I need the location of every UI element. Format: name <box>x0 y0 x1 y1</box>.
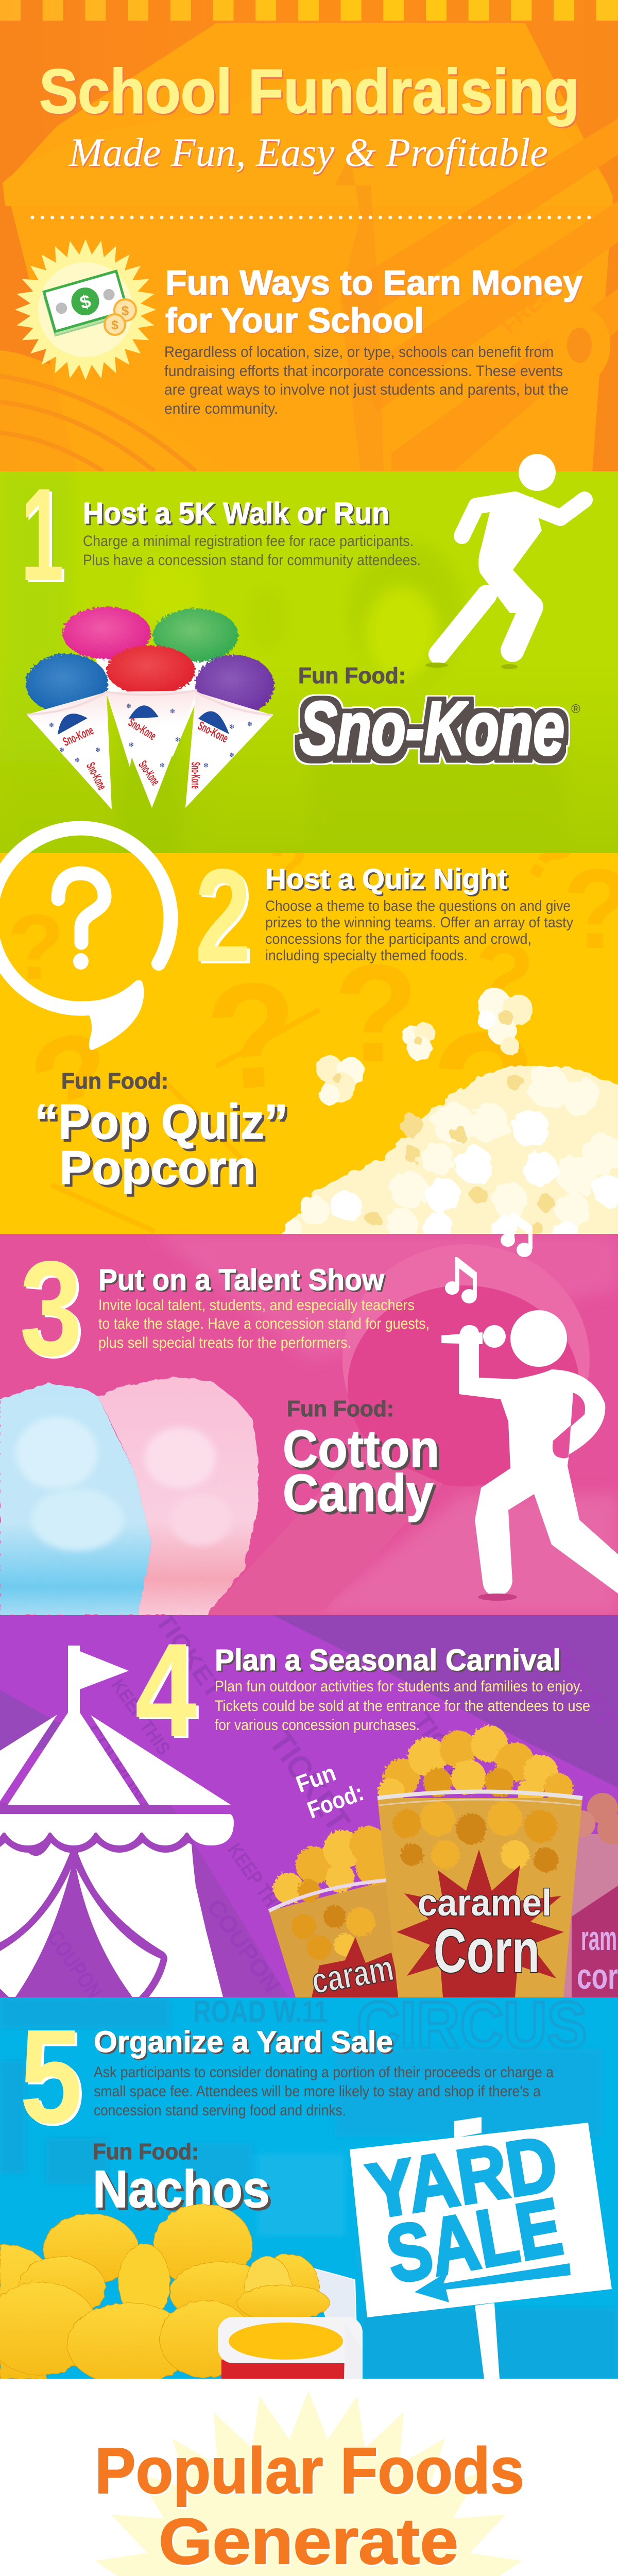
intro text: entire community. <box>164 400 278 417</box>
image: sno-kone cones <box>26 607 274 809</box>
panel: 4 plan a seasonal carnival: TICKET <box>262 1724 357 1838</box>
number 3: 3 <box>20 1233 82 1384</box>
body text: plus sell special treats for the performers. <box>98 1334 351 1351</box>
panel: 2 host a quiz night: ? <box>269 831 307 900</box>
icon: money in starburst: $ <box>122 303 129 318</box>
image: sno-kone cones: ❄ <box>59 746 64 754</box>
intro text <box>164 344 569 417</box>
heading: Popular Foods <box>95 2434 524 2507</box>
heading: Plan a Seasonal Carnival <box>215 1643 561 1677</box>
label: fun food: Food: <box>304 1778 367 1823</box>
label: fun food: Fun Food: <box>287 1396 394 1421</box>
heading: Host a Quiz Night <box>265 862 507 895</box>
image: caramel corn cups: caramel <box>418 1883 552 1924</box>
body text: small space fee. Attendees will be more likely to stay and shop if there's a <box>94 2083 541 2100</box>
image: sno-kone cones: Sno-Kone <box>135 758 162 788</box>
panel: popular foods <box>95 2391 522 2576</box>
food name: Candy <box>283 1464 434 1522</box>
panel: header and intro: FRESH <box>496 268 571 338</box>
food name <box>283 1419 439 1522</box>
image: sno-kone cones: ❄ <box>129 741 134 749</box>
panel: 4 plan a seasonal carnival: KEEP THIS <box>107 1675 175 1759</box>
label: fun food: Fun Food: <box>298 663 406 688</box>
image: sno-kone cones: Sno-Kone <box>61 723 96 749</box>
icon: question bubble <box>0 828 170 1050</box>
image: nachos and cheese <box>0 2204 363 2385</box>
body text: Ask participants to consider donating a portion of their proceeds or charge a <box>94 2064 554 2081</box>
panel: 4 plan a seasonal carnival: KEEP THIS <box>223 1839 291 1924</box>
panel: 2 host a quiz night: ? <box>507 803 591 902</box>
image: sno-kone cones: ❄ <box>247 720 252 728</box>
body text: Charge a minimal registration fee for race participants. <box>83 533 414 550</box>
intro text: Regardless of location, size, or type, schools can benefit from <box>164 344 554 361</box>
heading <box>80 2434 539 2576</box>
panel: 5 organize a yard sale <box>0 1988 618 2385</box>
panel: 4 plan a seasonal carnival <box>0 1608 618 2004</box>
checker strip <box>0 0 618 21</box>
number 2: 2 <box>195 841 251 990</box>
panel: 4 plan a seasonal carnival: COUPON <box>202 1894 286 1998</box>
icon: yard sale sign <box>350 2117 612 2379</box>
image: sno-kone cones: Sno-Kone <box>126 716 159 743</box>
image: sno-kone cones: Sno-Kone <box>188 762 202 789</box>
heading: Generate <box>159 2505 458 2576</box>
label: fun food: Fun <box>293 1759 339 1798</box>
number 4: 4 <box>135 1615 197 1764</box>
image: caramel corn cups: caram <box>308 1947 397 2002</box>
body text: concessions for the participants and crowd, <box>265 931 531 947</box>
body text <box>215 1678 590 1734</box>
intro text: fundraising efforts that incorporate concessions. These events <box>164 363 563 380</box>
heading: Host a 5K Walk or Run <box>83 497 389 530</box>
body text <box>94 2064 554 2119</box>
body text: Plan fun outdoor activities for students and families to enjoy. <box>215 1678 583 1695</box>
label: fun food: Fun Food: <box>61 1069 168 1094</box>
title: School Fundraising <box>39 56 579 126</box>
body text: to take the stage. Have a concession stand for guests, <box>98 1315 430 1332</box>
image: popcorn pile <box>273 1066 618 1247</box>
food name: Cotton <box>283 1419 439 1478</box>
starburst background <box>90 2391 527 2576</box>
body text <box>98 1297 430 1351</box>
label: fun food <box>293 1759 367 1823</box>
panel: 5 organize a yard sale: CIRCUS <box>356 1988 587 2063</box>
panel: 4 plan a seasonal carnival: TICKET <box>407 1707 484 1800</box>
panel: 2 host a quiz night: ? <box>8 895 64 999</box>
body text: prizes to the winning teams. Offer an array of tasty <box>265 914 573 931</box>
heading: Put on a Talent Show <box>98 1263 385 1297</box>
food name: Nachos <box>93 2160 270 2218</box>
image: cotton candy <box>0 1377 258 1615</box>
panel: 2 host a quiz night: ? <box>431 996 538 1192</box>
panel: 4 plan a seasonal carnival: COUPON <box>42 1926 107 2004</box>
image: sno-kone cones: Sno-Kone <box>83 760 109 792</box>
food name <box>35 1094 288 1194</box>
panel: 2 host a quiz night <box>0 803 618 1247</box>
panel: 5 organize a yard sale: ROAD W.11 <box>193 1994 328 2029</box>
body text: for various concession purchases. <box>215 1717 420 1734</box>
body text: concession stand serving food and drinks. <box>94 2102 346 2119</box>
image: sno-kone cones: ❄ <box>75 756 80 764</box>
image: floating popcorn <box>316 988 533 1105</box>
panel: 2 host a quiz night: ? <box>14 1000 133 1161</box>
image: sno-kone cones: ❄ <box>95 746 100 754</box>
heading: fun ways: Fun Ways to Earn Money <box>165 263 582 302</box>
body text <box>265 898 573 964</box>
image: sno-kone cones: ❄ <box>49 721 54 729</box>
food name: “Pop Quiz” <box>35 1094 288 1149</box>
heading: fun ways <box>165 263 582 340</box>
body text <box>83 533 421 569</box>
icon: music notes <box>445 1212 533 1303</box>
panel: 4 plan a seasonal carnival: TICKET <box>541 1635 618 1732</box>
panel: header and intro <box>0 0 618 471</box>
heading: Organize a Yard Sale <box>94 2025 393 2059</box>
heading: fun ways: for Your School <box>165 301 424 340</box>
panel: 2 host a quiz night: ? <box>461 918 542 1037</box>
number 5: 5 <box>20 2002 82 2151</box>
body text: including specialty themed foods. <box>265 947 468 964</box>
panel: 1 host a 5K <box>0 454 618 855</box>
panel: 3 put on a talent show <box>0 1212 618 1615</box>
image: sno-kone cones: ❄ <box>229 723 234 731</box>
panel: 4 plan a seasonal carnival: TICKET <box>150 1608 228 1704</box>
image: sno-kone cones: ❄ <box>175 736 180 743</box>
body text: Choose a theme to base the questions on and give <box>265 898 571 914</box>
image: sno-kone cones: ❄ <box>229 751 234 759</box>
image: sno-kone cones: ❄ <box>160 761 165 769</box>
registered mark: ® <box>571 702 580 716</box>
icon: money in starburst: $ <box>77 290 93 313</box>
body text: Plus have a concession stand for community attendees. <box>83 552 421 569</box>
icon: circus tent <box>0 1646 234 1997</box>
panel: 2 host a quiz night: ? <box>200 948 306 1123</box>
panel: 4 plan a seasonal carnival: COUPON <box>81 1721 150 1805</box>
icon: money in starburst: $ <box>111 318 118 332</box>
icon: runner <box>425 454 585 669</box>
label: fun food: Fun Food: <box>93 2139 199 2164</box>
image: caramel corn cups <box>269 1725 618 2002</box>
icon: yard sale sign: SALE <box>380 2182 568 2300</box>
body text: Invite local talent, students, and especially teachers <box>98 1297 415 1314</box>
panel: 2 host a quiz night: ? <box>334 936 418 1091</box>
icon: yard sale sign: YARD <box>362 2120 563 2234</box>
image: sno-kone cones: ❄ <box>126 702 131 710</box>
intro text: are great ways to involve not just students and parents, but the <box>164 381 569 398</box>
image: sno-kone cones: ❄ <box>203 761 209 769</box>
food name: Popcorn <box>59 1142 256 1194</box>
image: sno-kone cones: ❄ <box>170 707 175 715</box>
subtitle: Made Fun, Easy & Profitable <box>68 130 548 175</box>
image: sno-kone cones: Sno-Kone <box>196 719 230 745</box>
image: caramel corn cups: Corn <box>434 1917 540 1986</box>
icon: money in starburst <box>15 239 156 380</box>
number 1: 1 <box>21 461 64 608</box>
icon: singer <box>441 1310 618 1601</box>
